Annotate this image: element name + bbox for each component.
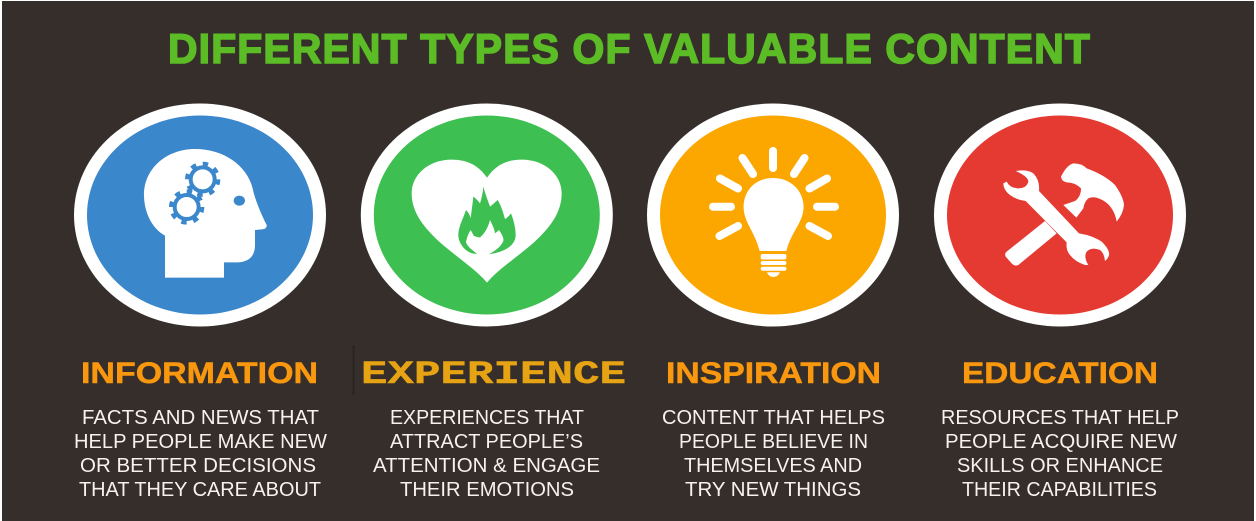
divider tick beside heading: [352, 345, 354, 395]
text: inspiration description: THEMSELVES AND: [684, 454, 862, 477]
text: inspiration description: [662, 406, 885, 501]
panel: experience: [352, 104, 626, 501]
text: experience description: ATTENTION & ENGAGE: [373, 454, 600, 477]
circle: information: [74, 104, 326, 326]
text: experience description: ATTRACT PEOPLE’S: [390, 430, 583, 453]
text: information description: OR BETTER DECISIONS: [80, 454, 316, 477]
text: education description: SKILLS OR ENHANCE: [957, 454, 1163, 477]
title: DIFFERENT TYPES OF VALUABLE CONTENT: [168, 25, 1091, 72]
circle: education: [934, 104, 1186, 326]
heading: education: EDUCATION: [962, 357, 1158, 390]
heading: experience: EXPERIENCE: [361, 356, 626, 393]
text: inspiration description: PEOPLE BELIEVE IN: [679, 430, 868, 453]
icon: heart with flame: [412, 160, 562, 283]
text: experience description: THEIR EMOTIONS: [400, 478, 574, 501]
panel: information: [74, 104, 328, 501]
text: information description: HELP PEOPLE MAKE NEW: [74, 430, 328, 453]
text: education description: [941, 406, 1179, 501]
icon: light bulb: [713, 151, 835, 277]
text: education description: RESOURCES THAT HELP: [941, 406, 1179, 429]
panel: education: [934, 104, 1186, 501]
text: information description: THAT THEY CARE ABOUT: [79, 478, 321, 501]
text: information description: FACTS AND NEWS THAT: [82, 406, 319, 429]
text: education description: PEOPLE ACQUIRE NEW: [945, 430, 1178, 453]
text: inspiration description: CONTENT THAT HELPS: [662, 406, 885, 429]
icon: head with gears: [144, 149, 267, 278]
circle: inspiration: [647, 104, 899, 326]
text: experience description: EXPERIENCES THAT: [390, 406, 584, 429]
heading: information: INFORMATION: [81, 357, 318, 390]
panel: inspiration: [647, 104, 899, 501]
text: education description: THEIR CAPABILITIES: [962, 478, 1157, 501]
text: inspiration description: TRY NEW THINGS: [685, 478, 861, 501]
icon: wrench and hammer: [1003, 163, 1124, 266]
circle: experience: [361, 104, 613, 326]
text: information description: [74, 406, 328, 501]
text: experience description: [373, 406, 600, 501]
heading: inspiration: INSPIRATION: [666, 357, 881, 390]
